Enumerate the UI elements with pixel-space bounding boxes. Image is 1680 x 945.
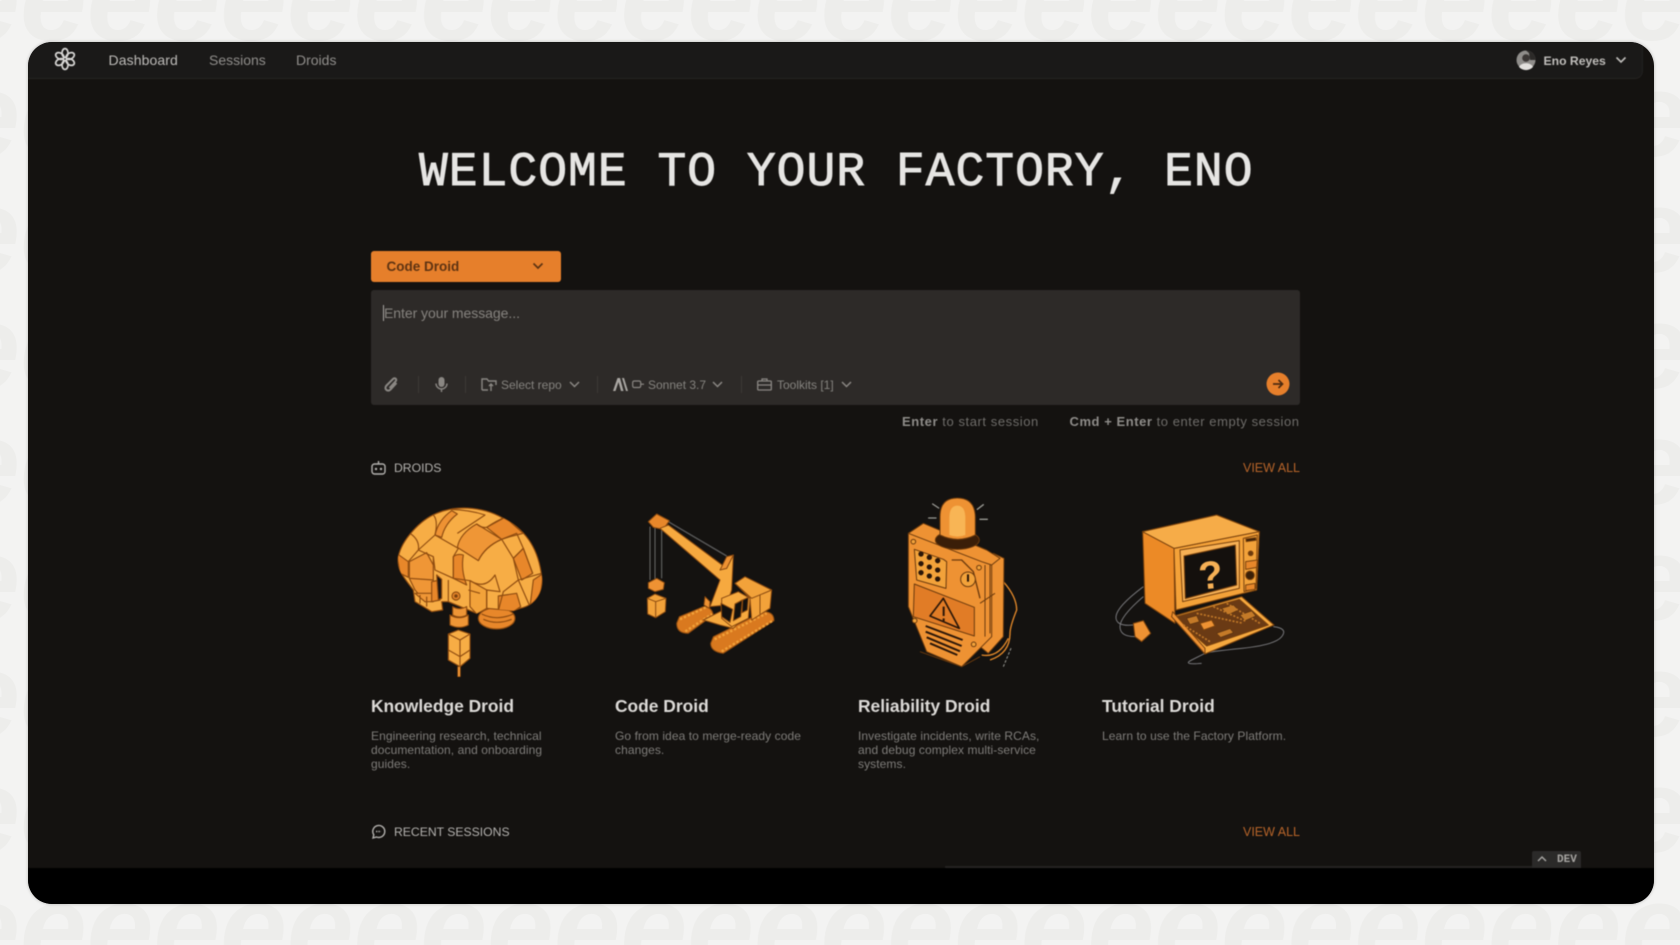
icon: user menu chevron xyxy=(1616,56,1626,64)
illustration: code droid crane xyxy=(646,513,775,654)
icon: droids robot xyxy=(370,460,386,476)
link: view all sessions: VIEW ALL xyxy=(1243,825,1300,839)
icon: toolkit briefcase xyxy=(756,378,772,392)
user name: Eno Reyes xyxy=(1544,54,1606,68)
screen question mark: ? xyxy=(1197,553,1224,599)
icon: repository xyxy=(480,378,498,392)
dev label: DEV xyxy=(1557,854,1577,866)
message input panel xyxy=(371,290,1300,405)
icon: anthropic mark xyxy=(612,377,628,392)
nav link: Dashboard: Dashboard xyxy=(108,52,178,68)
icon: dropdown chevron xyxy=(532,262,544,270)
icon: microphone xyxy=(434,376,448,392)
section heading: recent sessions: RECENT SESSIONS xyxy=(394,825,510,839)
navigation bar xyxy=(28,42,1643,79)
illustration: knowledge droid brain xyxy=(396,506,544,678)
input placeholder: Enter your message... xyxy=(384,305,520,321)
card: tutorial droid xyxy=(1101,696,1286,743)
card title: Tutorial Droid xyxy=(1102,696,1215,716)
hint: start session: Enter to start session xyxy=(902,414,1039,429)
card: knowledge droid xyxy=(371,696,542,771)
section heading: droids: DROIDS xyxy=(394,461,441,475)
dev badge xyxy=(1532,851,1581,868)
icon: toolkit chevron xyxy=(841,381,852,388)
icon: send button xyxy=(1266,372,1290,396)
page title: WELCOME TO YOUR FACTORY, ENO xyxy=(419,146,1254,200)
model selector: Sonnet 3.7 xyxy=(648,378,706,392)
icon: model chevron xyxy=(712,381,723,388)
toolkit selector: Toolkits [1] xyxy=(777,378,834,392)
illustration: tutorial droid computer xyxy=(1115,514,1285,665)
card title: Knowledge Droid xyxy=(371,696,514,716)
card title: Code Droid xyxy=(615,696,709,716)
dropdown label: Code Droid xyxy=(386,259,459,274)
card: reliability droid xyxy=(858,696,1039,771)
icon: dev caret xyxy=(1537,856,1547,862)
bottom black strip xyxy=(28,868,1654,904)
illustration: reliability droid alarm xyxy=(907,497,1018,668)
nav link: Sessions: Sessions xyxy=(209,52,266,68)
user avatar xyxy=(1516,50,1536,71)
icon: factory logo xyxy=(54,47,76,71)
icon: model tag xyxy=(632,380,644,389)
icon: repo chevron xyxy=(569,381,580,388)
nav link: Droids: Droids xyxy=(296,52,336,68)
card description: Learn to use the Factory Platform. xyxy=(1102,729,1286,743)
card: code droid xyxy=(614,696,801,757)
card description: Engineering research, technical documentation, and onboarding guides. xyxy=(371,729,542,771)
hint: empty session: Cmd + Enter to enter empty session xyxy=(1070,414,1300,429)
icon: recent sessions chat bubble xyxy=(371,824,386,840)
link: view all droids: VIEW ALL xyxy=(1243,461,1300,475)
card description: Investigate incidents, write RCAs, and debug complex multi-service systems. xyxy=(858,729,1039,771)
repo selector: Select repo xyxy=(501,378,562,392)
card title: Reliability Droid xyxy=(858,696,990,716)
droid selector dropdown xyxy=(371,251,561,282)
dev toolbar edge xyxy=(945,866,1535,868)
card description: Go from idea to merge-ready code changes. xyxy=(615,729,801,757)
icon: paperclip xyxy=(384,376,398,392)
